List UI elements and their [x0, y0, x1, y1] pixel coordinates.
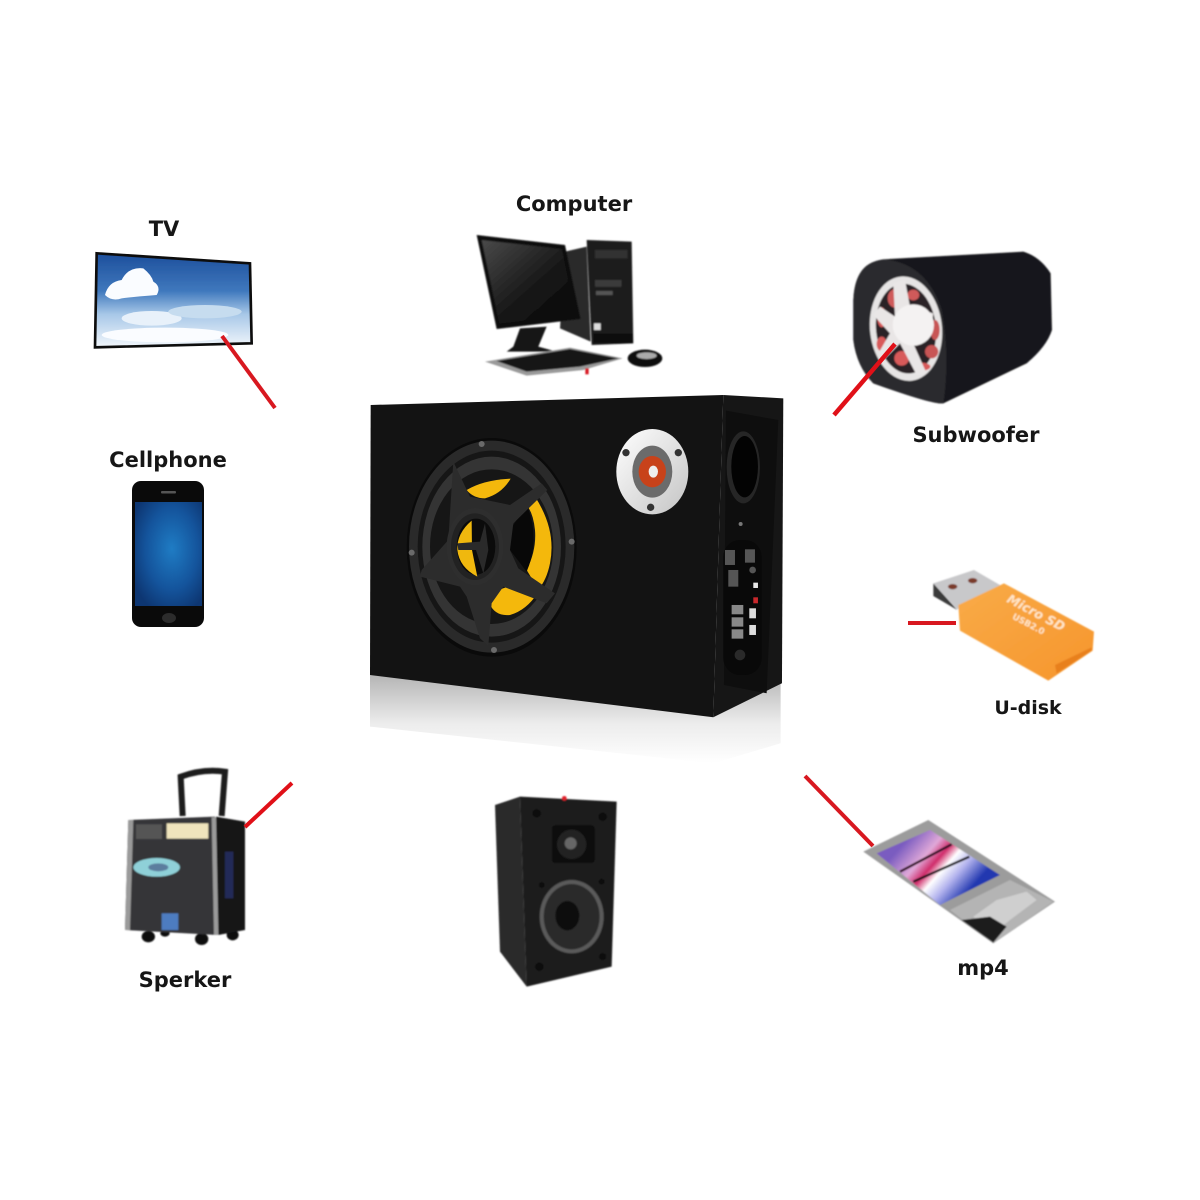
label: TV: TV [149, 217, 180, 241]
side recess [724, 411, 778, 693]
icon: bookshelf speaker [495, 796, 617, 987]
tower side [560, 247, 591, 342]
tube body [853, 252, 1052, 403]
monitor [477, 235, 581, 329]
red connector tip [585, 368, 589, 374]
USB plug [933, 570, 1002, 609]
hub [447, 508, 503, 585]
display and panel [136, 824, 162, 839]
bass port [727, 431, 760, 503]
wheel [865, 273, 947, 384]
yellow cone sections [467, 479, 511, 498]
tower front [587, 240, 633, 345]
wheels [142, 930, 239, 945]
woofer [407, 438, 577, 657]
icon: TV [95, 253, 252, 347]
icon: trolley speaker [125, 771, 245, 945]
control panel [723, 522, 762, 675]
icon: USB card reader [933, 570, 1094, 681]
connector: subwoofer [834, 344, 895, 415]
wheel hub and spokes [873, 280, 933, 375]
label: Subwoofer: Subwoofer [912, 423, 1040, 447]
reader body [958, 583, 1094, 681]
body side [216, 817, 245, 935]
label: Computer: Computer [516, 192, 633, 216]
label: U-disk: U-disk [994, 697, 1062, 719]
card text: Micro SD [1005, 591, 1068, 634]
icon: USB card reader: USB2.0 [1010, 612, 1046, 638]
monitor stand [507, 327, 557, 352]
keyboard [485, 348, 623, 376]
label: Cellphone: Cellphone [109, 448, 227, 472]
icon: computer [477, 235, 662, 376]
icon: mp4 cards [863, 820, 1055, 943]
connector: U-disk [908, 621, 956, 625]
cabinet side [713, 395, 783, 717]
card pack [950, 880, 1053, 943]
main product: subwoofer cabinet [370, 395, 783, 763]
mouse [628, 350, 662, 367]
tweeter [616, 429, 688, 514]
screws [409, 441, 575, 653]
icon: cellphone [132, 481, 204, 627]
icon: subwoofer tube [853, 252, 1052, 403]
label: mp4: mp4 [957, 956, 1009, 980]
cabinet front [370, 395, 723, 717]
label: Sperker: Sperker [139, 968, 232, 992]
handle [181, 771, 225, 816]
connector: TV [222, 336, 275, 408]
red connector tip [562, 796, 567, 801]
connector: trolley speaker [245, 783, 292, 827]
screens [877, 830, 1000, 905]
connector: mp4 [805, 776, 873, 846]
body front [125, 817, 217, 935]
front ring [853, 259, 946, 403]
badge [133, 858, 180, 877]
cabinet reflection [370, 674, 781, 763]
basket spokes [420, 462, 555, 646]
